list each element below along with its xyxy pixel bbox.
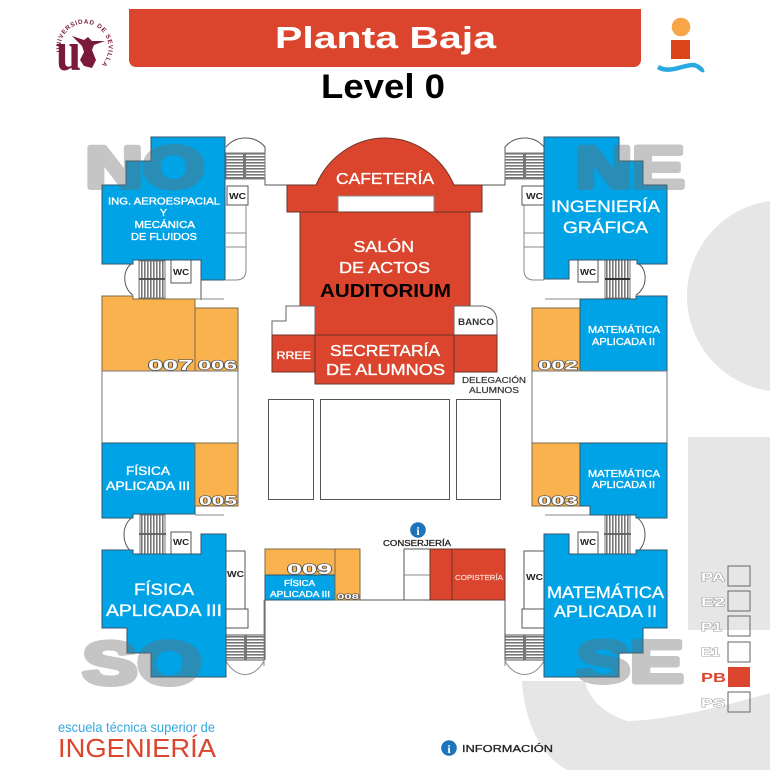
icon: information at conserjería bbox=[410, 522, 426, 538]
floor selector legend: E1 bbox=[701, 645, 720, 659]
south rooms: 009 bbox=[265, 549, 335, 578]
department block: Matemática Aplicada II south-east: MATEMÁTICA bbox=[547, 583, 664, 602]
subtitle: Level 0 bbox=[321, 68, 445, 106]
student delegation label bbox=[462, 375, 526, 395]
east wing: room 002: 002 bbox=[538, 358, 578, 372]
student office: SECRETARÍA bbox=[330, 343, 441, 360]
south-east service core bbox=[505, 551, 544, 674]
south-east upper stairs and WC bbox=[578, 515, 645, 554]
south rooms: Física Aplicada III small: APLICADA III bbox=[270, 589, 330, 599]
information legend bbox=[441, 740, 553, 756]
red central block: cafeteria: CAFETERÍA bbox=[336, 171, 435, 188]
floor selector legend: E2 bbox=[701, 595, 726, 609]
east wing: Matemática Aplicada II lower bbox=[580, 443, 667, 518]
compass label: SE: SE bbox=[576, 630, 684, 695]
south rooms: 009: 009 bbox=[287, 561, 332, 578]
header title: Planta Baja bbox=[275, 20, 497, 55]
background: large grey emblem shapes bbox=[522, 200, 770, 770]
student office bbox=[315, 335, 454, 384]
RREE room bbox=[272, 335, 315, 372]
south rooms: Física Aplicada III small bbox=[265, 575, 335, 600]
north-east service core bbox=[454, 138, 544, 280]
department block: Física Aplicada III south-west: APLICADA III bbox=[106, 601, 222, 620]
copistería: COPISTERÍA bbox=[455, 573, 503, 582]
north-east service core: WC bbox=[526, 192, 543, 201]
west wing: room 006 bbox=[195, 299, 238, 372]
floor selector legend: PB bbox=[701, 671, 726, 685]
bank: BANCO bbox=[458, 317, 494, 327]
department block: Matemática Aplicada II south-east bbox=[544, 534, 667, 677]
compass label: NE: NE bbox=[576, 136, 684, 200]
conserjería label: CONSERJERÍA bbox=[383, 538, 451, 548]
east wing: Matemática Aplicada II lower: MATEMÁTICA bbox=[588, 467, 660, 480]
school wordmark: INGENIERÍA bbox=[58, 733, 217, 763]
header bar bbox=[129, 9, 641, 67]
west wing: hall bbox=[102, 371, 238, 443]
compass label: SO: SO bbox=[82, 630, 202, 697]
department block: Física Aplicada III south-west bbox=[102, 534, 226, 677]
central courtyards bbox=[268, 400, 500, 500]
south-west service core: WC bbox=[227, 570, 244, 579]
department block: Ing. Aeroespacial bbox=[102, 137, 225, 280]
west wing: room 007: 007 bbox=[148, 358, 193, 374]
south rooms: 008: 008 bbox=[337, 592, 359, 601]
department block: Ing. Aeroespacial: DE FLUIDOS bbox=[131, 231, 197, 243]
east wing: room 003 bbox=[532, 443, 590, 515]
student delegation room bbox=[454, 335, 497, 372]
west wing: Física Aplicada III: FÍSICA bbox=[126, 465, 170, 478]
north-west service core bbox=[226, 138, 316, 280]
logo: Universidad de Sevilla: u bbox=[56, 21, 81, 83]
compass label: NO: NO bbox=[86, 136, 204, 200]
floor selector legend: PA bbox=[701, 570, 726, 584]
school wordmark bbox=[58, 719, 217, 763]
floor selector legend: PS bbox=[701, 696, 725, 710]
south-west upper stairs and WC: WC bbox=[173, 538, 189, 547]
department block: Ing. Aeroespacial: ING. AEROESPACIAL bbox=[108, 196, 220, 208]
north-west service core: WC bbox=[229, 192, 246, 201]
student delegation label: DELEGACIÓN bbox=[462, 375, 526, 385]
east wing: Matemática Aplicada II lower: APLICADA II bbox=[592, 479, 655, 491]
department block: Ing. Aeroespacial: MECÁNICA bbox=[134, 218, 195, 231]
red central block: cafeteria bbox=[287, 138, 482, 212]
information legend: INFORMACIÓN bbox=[462, 742, 553, 755]
south rooms: 008 bbox=[335, 549, 360, 601]
floor selector legend bbox=[701, 566, 750, 712]
information legend: i bbox=[447, 742, 451, 756]
department block: Ing. Aeroespacial: Y bbox=[160, 207, 167, 219]
red central block: auditorium: AUDITORIUM bbox=[320, 281, 451, 301]
logo: Universidad de Sevilla: UNIVERSIDAD DE SEVILLA bbox=[56, 19, 113, 66]
RREE room: RREE bbox=[276, 350, 311, 362]
red central block: auditorium bbox=[300, 212, 470, 335]
north-east lower stairs and WC: WC bbox=[580, 268, 596, 277]
west wing: room 006: 006 bbox=[198, 358, 237, 372]
east wing: room 002 bbox=[532, 299, 580, 372]
copistería bbox=[452, 549, 505, 600]
south-east service core: WC bbox=[526, 573, 543, 582]
west wing: room 005: 005 bbox=[199, 493, 237, 508]
south-west service core bbox=[226, 551, 264, 674]
north-east lower stairs and WC bbox=[578, 260, 645, 298]
east wing: room 003: 003 bbox=[538, 493, 578, 508]
east wing: hall bbox=[532, 371, 667, 443]
west wing: Física Aplicada III bbox=[102, 443, 195, 518]
department block: Matemática Aplicada II south-east: APLICADA II bbox=[554, 603, 657, 621]
student delegation label: ALUMNOS bbox=[469, 385, 519, 395]
red central block: auditorium: DE ACTOS bbox=[339, 260, 430, 277]
department block: Ingeniería Gráfica: INGENIERÍA bbox=[551, 197, 661, 216]
north-west lower stairs and WC bbox=[125, 260, 201, 300]
logo: school symbol bbox=[658, 18, 704, 70]
south-east upper stairs and WC: WC bbox=[580, 538, 596, 547]
west wing: room 005 bbox=[195, 443, 238, 515]
east wing: Matemática Aplicada II upper: MATEMÁTICA bbox=[588, 323, 660, 336]
department block: Ingeniería Gráfica: GRÁFICA bbox=[563, 218, 649, 237]
bank bbox=[454, 306, 497, 335]
small room left of auditorium bbox=[272, 306, 315, 335]
west wing: Física Aplicada III: APLICADA III bbox=[106, 481, 190, 493]
south corridor walls bbox=[265, 600, 505, 660]
department block: Física Aplicada III south-west: FÍSICA bbox=[134, 580, 195, 599]
west wing: room 007 bbox=[102, 296, 195, 374]
east wing: Matemática Aplicada II upper: APLICADA II bbox=[592, 336, 655, 348]
south rooms: Física Aplicada III small: FÍSICA bbox=[284, 578, 315, 588]
icon: information at conserjería: i bbox=[416, 524, 420, 538]
small red room bbox=[430, 549, 452, 600]
conserjería rooms bbox=[404, 549, 430, 600]
student office: DE ALUMNOS bbox=[326, 362, 445, 379]
north-west lower stairs and WC: WC bbox=[173, 268, 189, 277]
east wing: Matemática Aplicada II upper bbox=[580, 296, 667, 371]
red central block: auditorium: SALÓN bbox=[354, 237, 414, 256]
school wordmark: escuela técnica superior de bbox=[58, 719, 215, 735]
department block: Ingeniería Gráfica bbox=[544, 137, 667, 279]
floor selector legend: P1 bbox=[701, 620, 722, 634]
south-west upper stairs and WC bbox=[124, 515, 191, 554]
